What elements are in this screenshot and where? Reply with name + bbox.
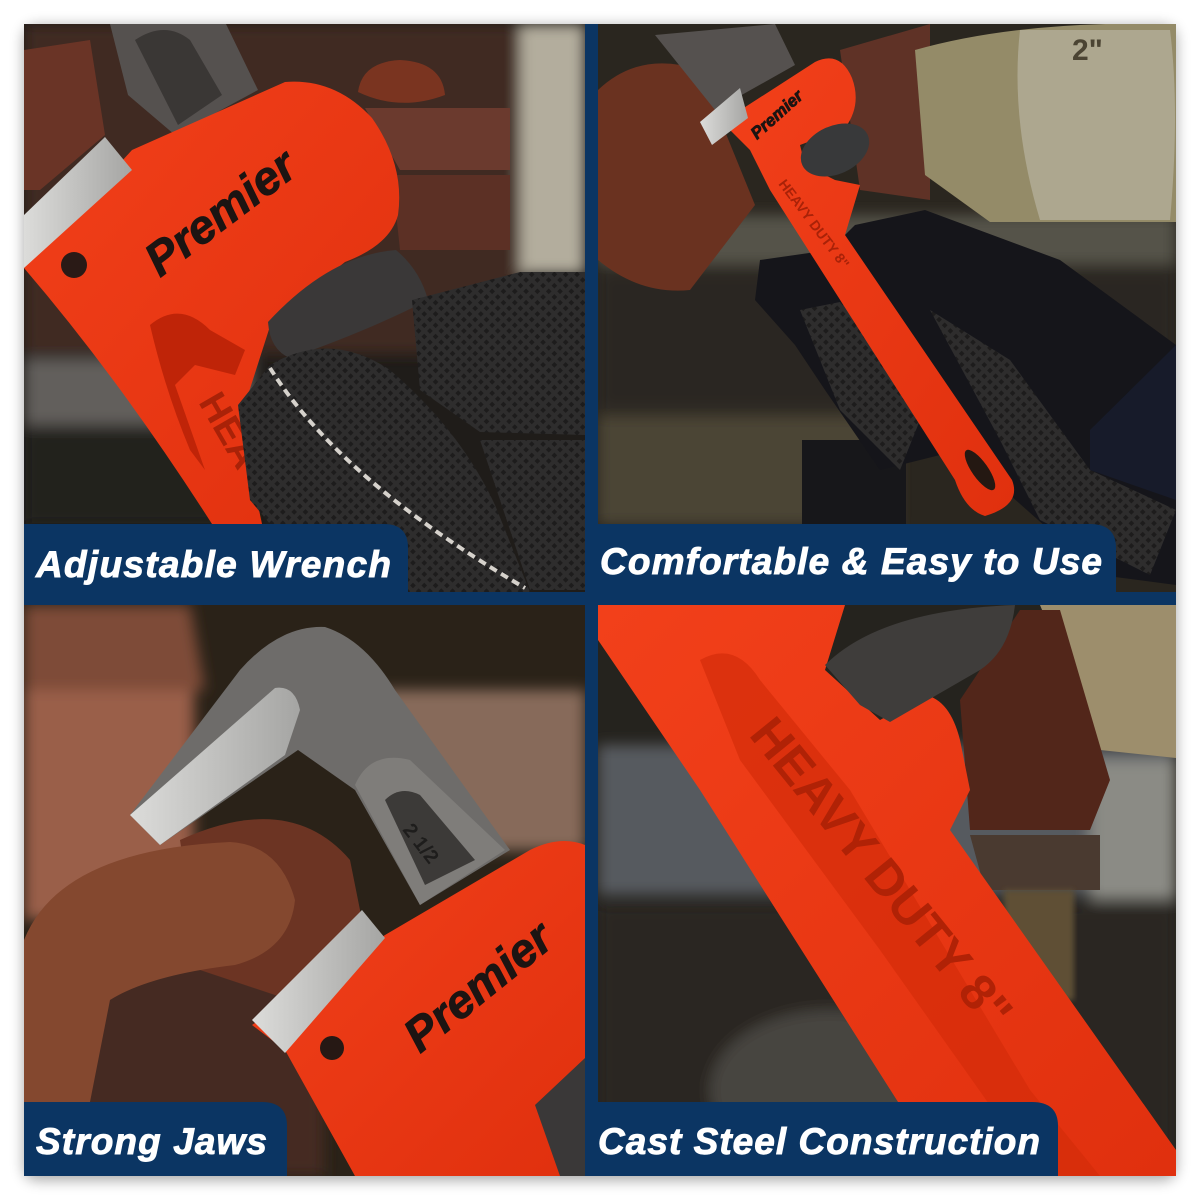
jaw slot <box>355 758 505 905</box>
body shading groove <box>700 653 1100 1176</box>
label tab <box>598 524 1116 592</box>
wrench body <box>24 82 399 524</box>
rivet <box>320 1036 344 1060</box>
brand text: Premier <box>134 137 308 286</box>
icon: wrench jaw top <box>655 24 795 110</box>
icon: upper wrench jaw <box>110 24 258 135</box>
slot numerals: 2 1/2 <box>398 820 443 868</box>
photo background <box>598 24 1176 592</box>
wrench body <box>598 605 1176 1176</box>
icon: pipe <box>24 842 295 1102</box>
cast text: HEAVY DUTY 8" <box>776 176 853 271</box>
rivet <box>61 252 87 278</box>
icon: steel hook jaw <box>130 627 510 905</box>
brand text: Premier <box>393 909 564 1062</box>
label text: Strong Jaws <box>36 1121 267 1162</box>
photo background <box>24 605 585 1176</box>
panel: cast steel construction <box>598 605 1176 1176</box>
icon: steel teeth <box>24 137 132 268</box>
wrench <box>722 58 1014 516</box>
label text: Comfortable & Easy to Use <box>600 541 1102 582</box>
jaw steel face <box>130 688 300 845</box>
knurled wheel <box>535 1058 585 1176</box>
jaw slot recess <box>385 791 475 885</box>
photo background <box>598 605 1176 1176</box>
label text: Adjustable Wrench <box>35 544 391 585</box>
label text: Cast Steel Construction <box>598 1121 1040 1162</box>
jaw slot <box>135 30 222 125</box>
valve markings: 2" <box>1072 34 1103 67</box>
icon: glove <box>755 210 1176 585</box>
knurled wheel <box>268 250 428 358</box>
cast lettering: HEAVY DUTY 8" <box>739 707 1023 1039</box>
brand text: Premier <box>747 86 808 143</box>
label tab <box>24 1102 287 1176</box>
wrench knurled wheel <box>800 124 870 176</box>
wrench handle groove <box>150 314 245 470</box>
knurled wheel <box>825 605 1015 722</box>
icon: gloved hand <box>238 272 585 592</box>
cast lettering: HEA <box>190 386 267 476</box>
panel: strong jaws <box>24 605 585 1176</box>
photo background <box>24 24 585 592</box>
steel teeth <box>252 910 385 1053</box>
red body <box>252 841 585 1176</box>
label tab <box>24 524 408 592</box>
label tab <box>598 1102 1058 1176</box>
wrench handle eye <box>964 450 996 490</box>
panel: adjustable wrench <box>24 24 585 592</box>
icon: wrench teeth <box>700 88 748 145</box>
panel: comfortable and easy to use <box>598 24 1176 605</box>
